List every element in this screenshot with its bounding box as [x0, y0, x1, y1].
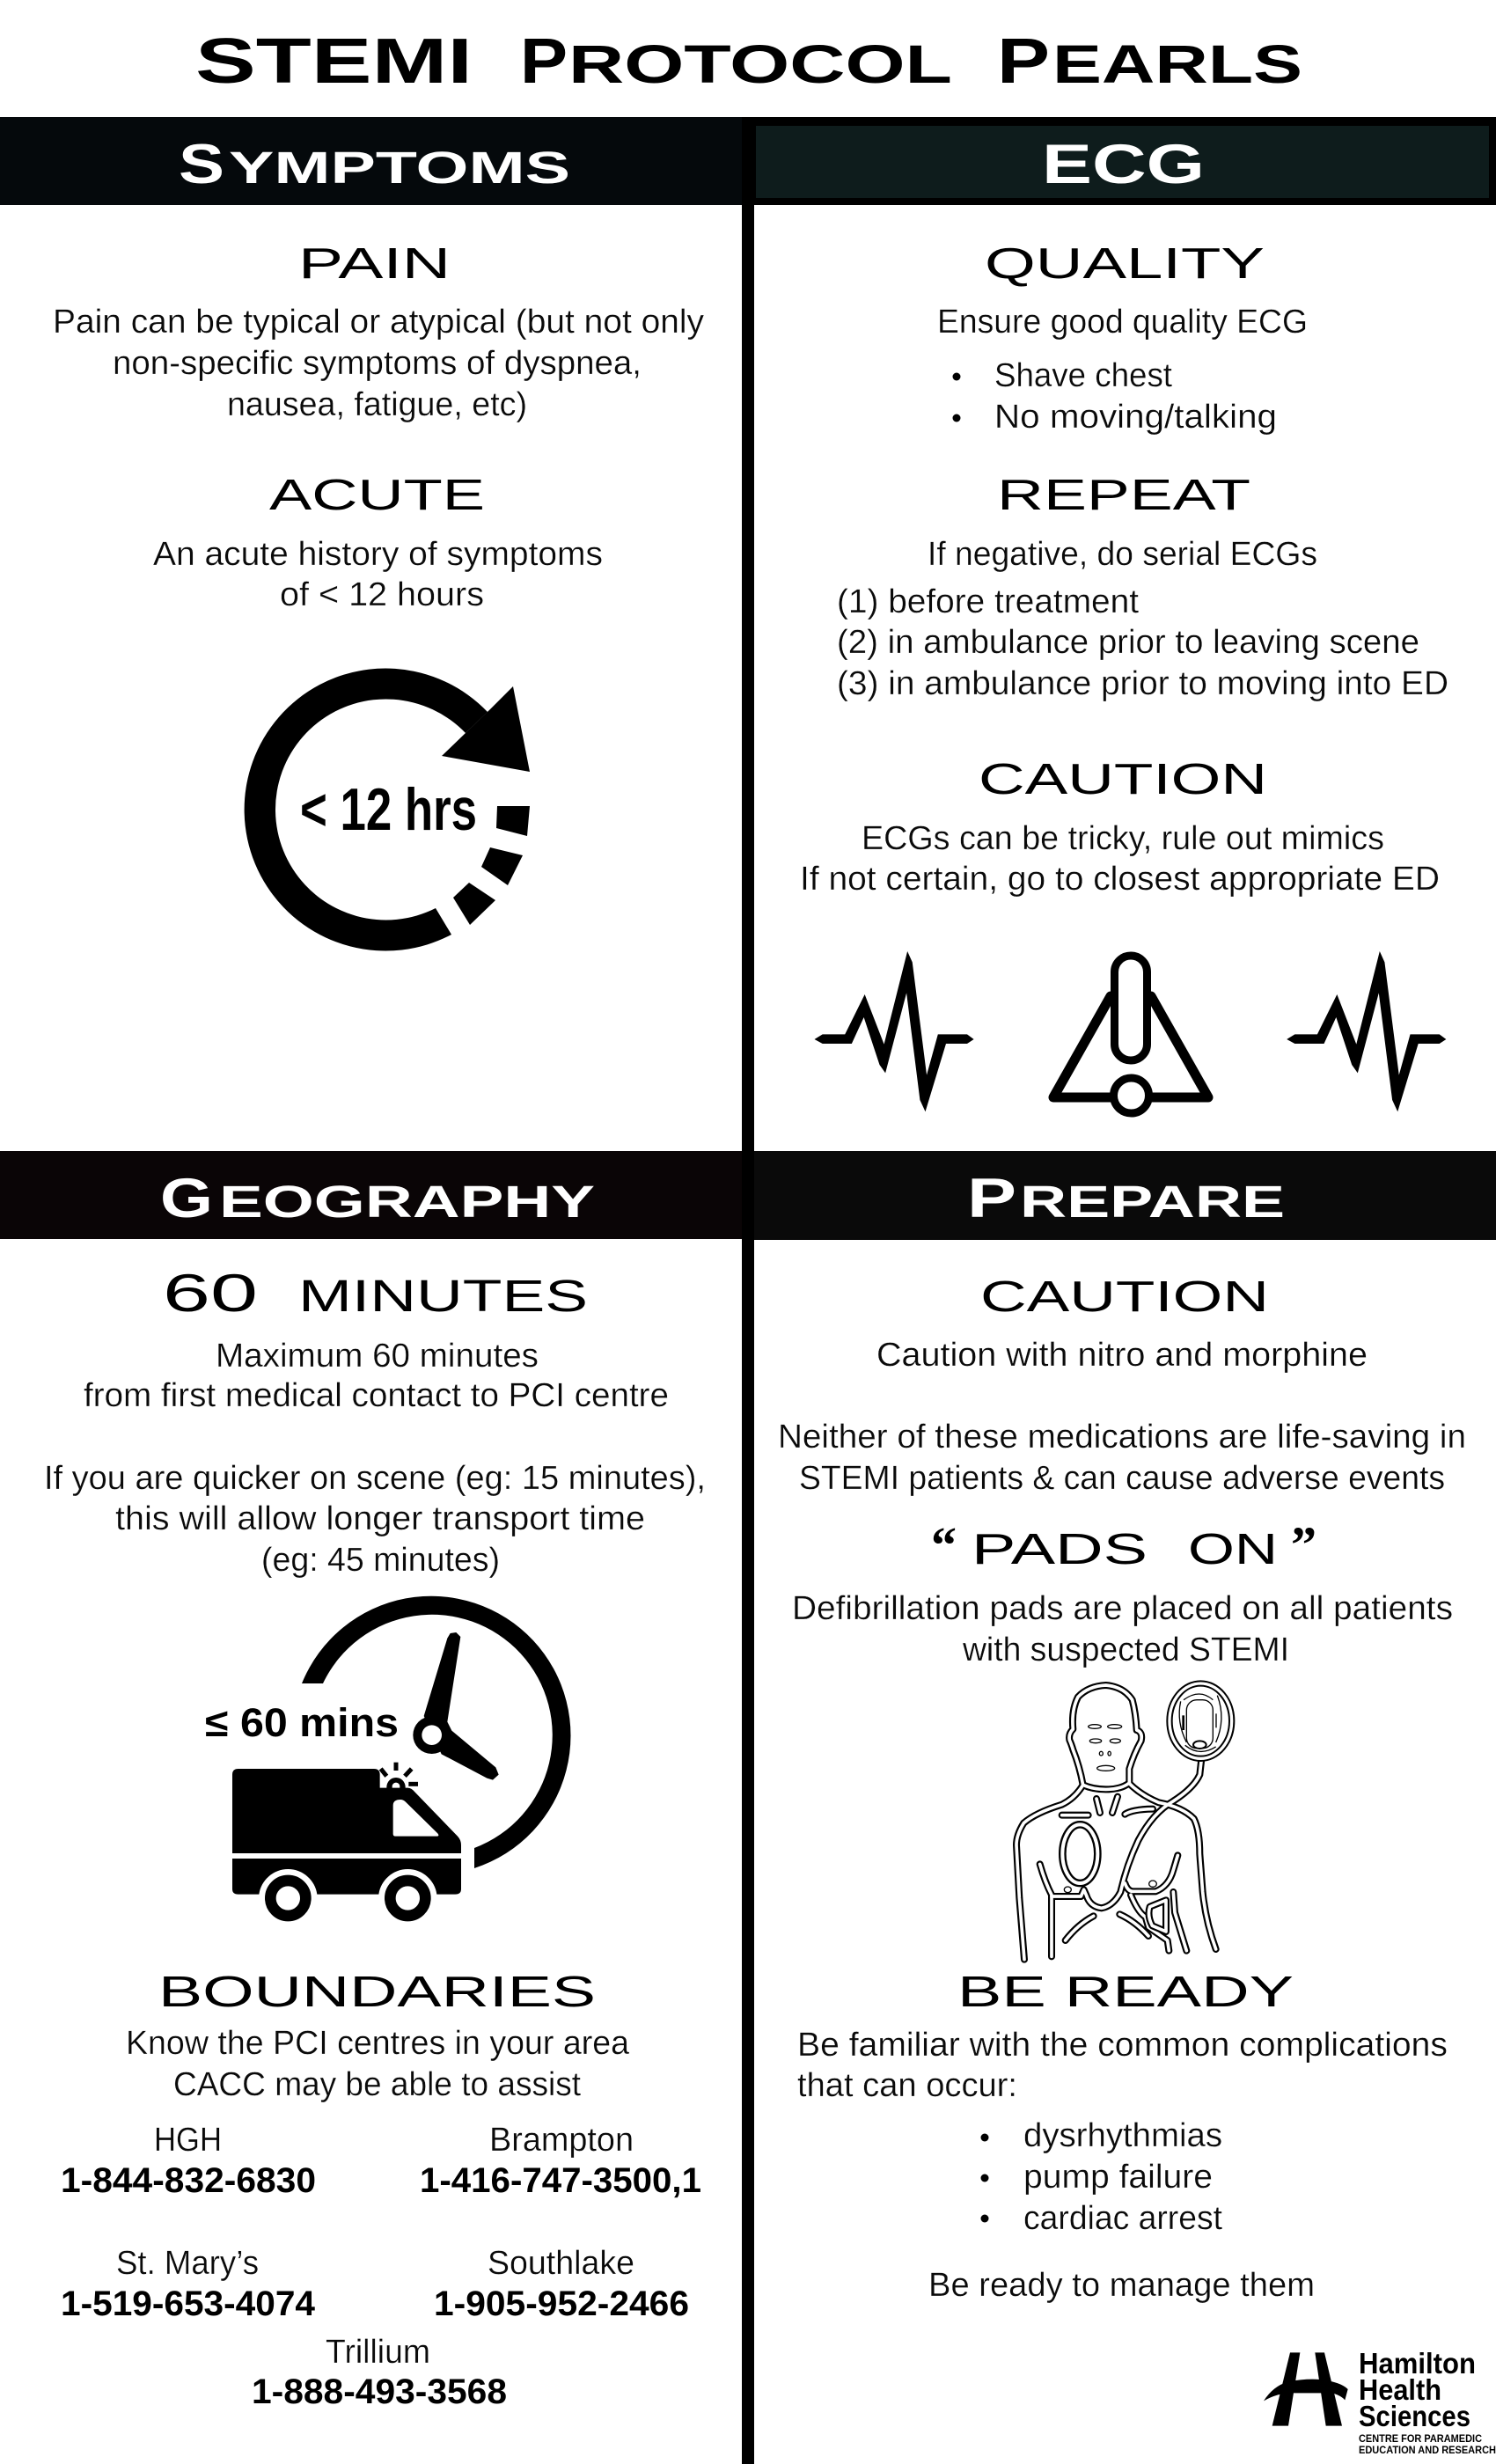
title: P — [520, 26, 568, 97]
text block: be ready to manage: Be ready to manage them — [928, 2267, 1315, 2304]
header band: ecg — [754, 117, 1496, 205]
icon: 12 hour circular arrow — [245, 669, 530, 951]
icon: ambulance and clock — [205, 1596, 571, 1916]
contact: Brampton: 1-416-747-3500,1 — [420, 2161, 701, 2200]
heading: pads on: ” — [1291, 1516, 1316, 1573]
heading: pads on — [931, 1516, 1316, 1573]
text block: boundaries — [126, 2025, 630, 2103]
icon: ecg trace left — [815, 951, 974, 1111]
text block: pads on: Defibrillation pads are placed on all patients — [792, 1590, 1453, 1627]
title: STEMI — [195, 26, 473, 97]
text block: pain: nausea, fatigue, etc) — [227, 386, 527, 423]
text block: be ready — [797, 2027, 1448, 2104]
heading: pads on: ON — [1188, 1525, 1278, 1573]
contact: Brampton — [420, 2122, 701, 2200]
contact: St. Mary's: St. Mary’s — [116, 2245, 259, 2282]
text block: acute — [153, 536, 603, 613]
text block: pain: Pain can be typical or atypical (but not only — [53, 304, 704, 341]
text block: caution: STEMI patients & can cause adverse events — [799, 1460, 1445, 1497]
heading: 60 minutes — [163, 1264, 588, 1323]
logo: Hamilton Health Sciences: CENTRE FOR PARAMEDIC — [1359, 2432, 1482, 2445]
contact: St. Mary's: 1-519-653-4074 — [61, 2284, 316, 2323]
header band: symptoms: S — [179, 134, 224, 195]
heading: boundaries: BOUNDARIES — [158, 1968, 596, 2016]
text block: repeat: (1) before treatment — [837, 583, 1139, 620]
text block: 60 minutes: this will allow longer transport time — [115, 1500, 645, 1537]
text block: caution: Caution with nitro and morphine — [876, 1337, 1368, 1374]
text block: boundaries: Know the PCI centres in your area — [126, 2025, 630, 2062]
text block: quality: Shave chest — [994, 357, 1172, 394]
contact: Brampton: Brampton — [489, 2122, 634, 2159]
heading: be ready: BE READY — [957, 1968, 1294, 2016]
heading: acute: ACUTE — [269, 471, 485, 519]
list: complications — [980, 2117, 1222, 2237]
icon: 12 hour circular arrow: < 12 hrs — [300, 776, 477, 843]
heading: 60 minutes: MINUTES — [298, 1271, 588, 1321]
list: complications: dysrhythmias — [1023, 2117, 1222, 2154]
header band: symptoms: YMPTOMS — [229, 143, 570, 193]
contact: Southlake: 1-905-952-2466 — [434, 2284, 689, 2323]
header band: prepare: REPARE — [1020, 1177, 1285, 1227]
text block: caution: ECGs can be tricky, rule out mimics — [862, 820, 1384, 857]
text block: quality: Ensure good quality ECG — [937, 304, 1308, 341]
panel: symptoms — [0, 117, 742, 951]
text block: pads on: with suspected STEMI — [962, 1632, 1289, 1668]
text block: 60 minutes: If you are quicker on scene (eg: 15 minutes), — [44, 1460, 706, 1497]
text block: boundaries: CACC may be able to assist — [173, 2066, 581, 2103]
text block: 60 minutes — [44, 1338, 706, 1579]
panel: prepare — [754, 1151, 1496, 2456]
logo: Hamilton Health Sciences: Health — [1359, 2373, 1441, 2406]
text block: caution: Neither of these medications are life-saving in — [778, 1419, 1466, 1456]
contact: Southlake — [434, 2245, 689, 2323]
title: EARLS — [1052, 34, 1302, 94]
title: P — [997, 26, 1050, 97]
heading: quality: QUALITY — [985, 239, 1265, 288]
header band: geography — [0, 1151, 742, 1239]
contact: St. Mary's — [61, 2245, 316, 2323]
heading: caution: CAUTION — [979, 755, 1267, 803]
header band: prepare: P — [967, 1168, 1016, 1229]
text block: 60 minutes: Maximum 60 minutes — [216, 1338, 539, 1375]
heading: repeat: REPEAT — [997, 471, 1250, 519]
text block: 60 minutes: (eg: 45 minutes) — [261, 1542, 500, 1579]
logo: Hamilton Health Sciences: Hamilton — [1359, 2347, 1476, 2380]
text block: repeat: (2) in ambulance prior to leaving scene — [837, 624, 1419, 661]
text block: caution — [800, 820, 1440, 898]
contact: Trillium — [252, 2334, 507, 2411]
heading: caution: CAUTION — [980, 1272, 1269, 1321]
text block: repeat: If negative, do serial ECGs — [928, 536, 1317, 573]
header band: symptoms — [0, 117, 742, 205]
header band: prepare — [754, 1151, 1496, 1240]
contact: Trillium: 1-888-493-3568 — [252, 2372, 507, 2411]
header band: geography: G — [160, 1168, 213, 1229]
text block: be ready: that can occur: — [797, 2067, 1017, 2104]
icon: ecg trace right — [1287, 951, 1446, 1111]
text block: quality — [937, 304, 1308, 436]
heading: pads on: “ — [931, 1516, 957, 1573]
icon: warning triangle — [1053, 956, 1208, 1113]
icon: ambulance and clock: ≤ 60 mins — [205, 1700, 399, 1745]
text block: 60 minutes: from first medical contact to PCI centre — [84, 1377, 669, 1414]
title: ROTOCOL — [568, 34, 952, 94]
text block: repeat: (3) in ambulance prior to moving into ED — [837, 665, 1448, 702]
heading: pain: PAIN — [298, 239, 451, 288]
heading: 60 minutes: 60 — [163, 1264, 258, 1323]
list: complications: pump failure — [1023, 2159, 1213, 2196]
text block: pain: non-specific symptoms of dyspnea, — [113, 345, 642, 382]
header band: geography: EOGRAPHY — [219, 1177, 595, 1227]
icon: torso with defibrillation pads — [1016, 1683, 1232, 1960]
contact: HGH: HGH — [154, 2122, 222, 2159]
text block: be ready: Be familiar with the common complications — [797, 2027, 1448, 2064]
logo: Hamilton Health Sciences: Sciences — [1359, 2400, 1470, 2432]
text block: repeat — [837, 536, 1448, 702]
text block: acute: of < 12 hours — [280, 576, 484, 613]
text block: pain — [53, 304, 704, 423]
text block: caution — [778, 1337, 1466, 1497]
list: complications: cardiac arrest — [1023, 2200, 1222, 2237]
logo: Hamilton Health Sciences — [1264, 2347, 1496, 2456]
header band: ecg: ECG — [1042, 134, 1205, 195]
panel: ecg — [754, 117, 1496, 1113]
text block: caution: If not certain, go to closest appropriate ED — [800, 861, 1440, 898]
text block: quality: No moving/talking — [994, 399, 1277, 436]
title — [195, 26, 1302, 97]
panel: geography — [0, 1151, 742, 2411]
text block: acute: An acute history of symptoms — [153, 536, 603, 573]
contact: HGH: 1-844-832-6830 — [61, 2161, 316, 2200]
contact: Southlake: Southlake — [488, 2245, 634, 2282]
contact: Trillium: Trillium — [326, 2334, 430, 2371]
heading: pads on: PADS — [972, 1525, 1148, 1573]
text block: pads on — [792, 1590, 1453, 1668]
contact: HGH — [61, 2122, 316, 2200]
